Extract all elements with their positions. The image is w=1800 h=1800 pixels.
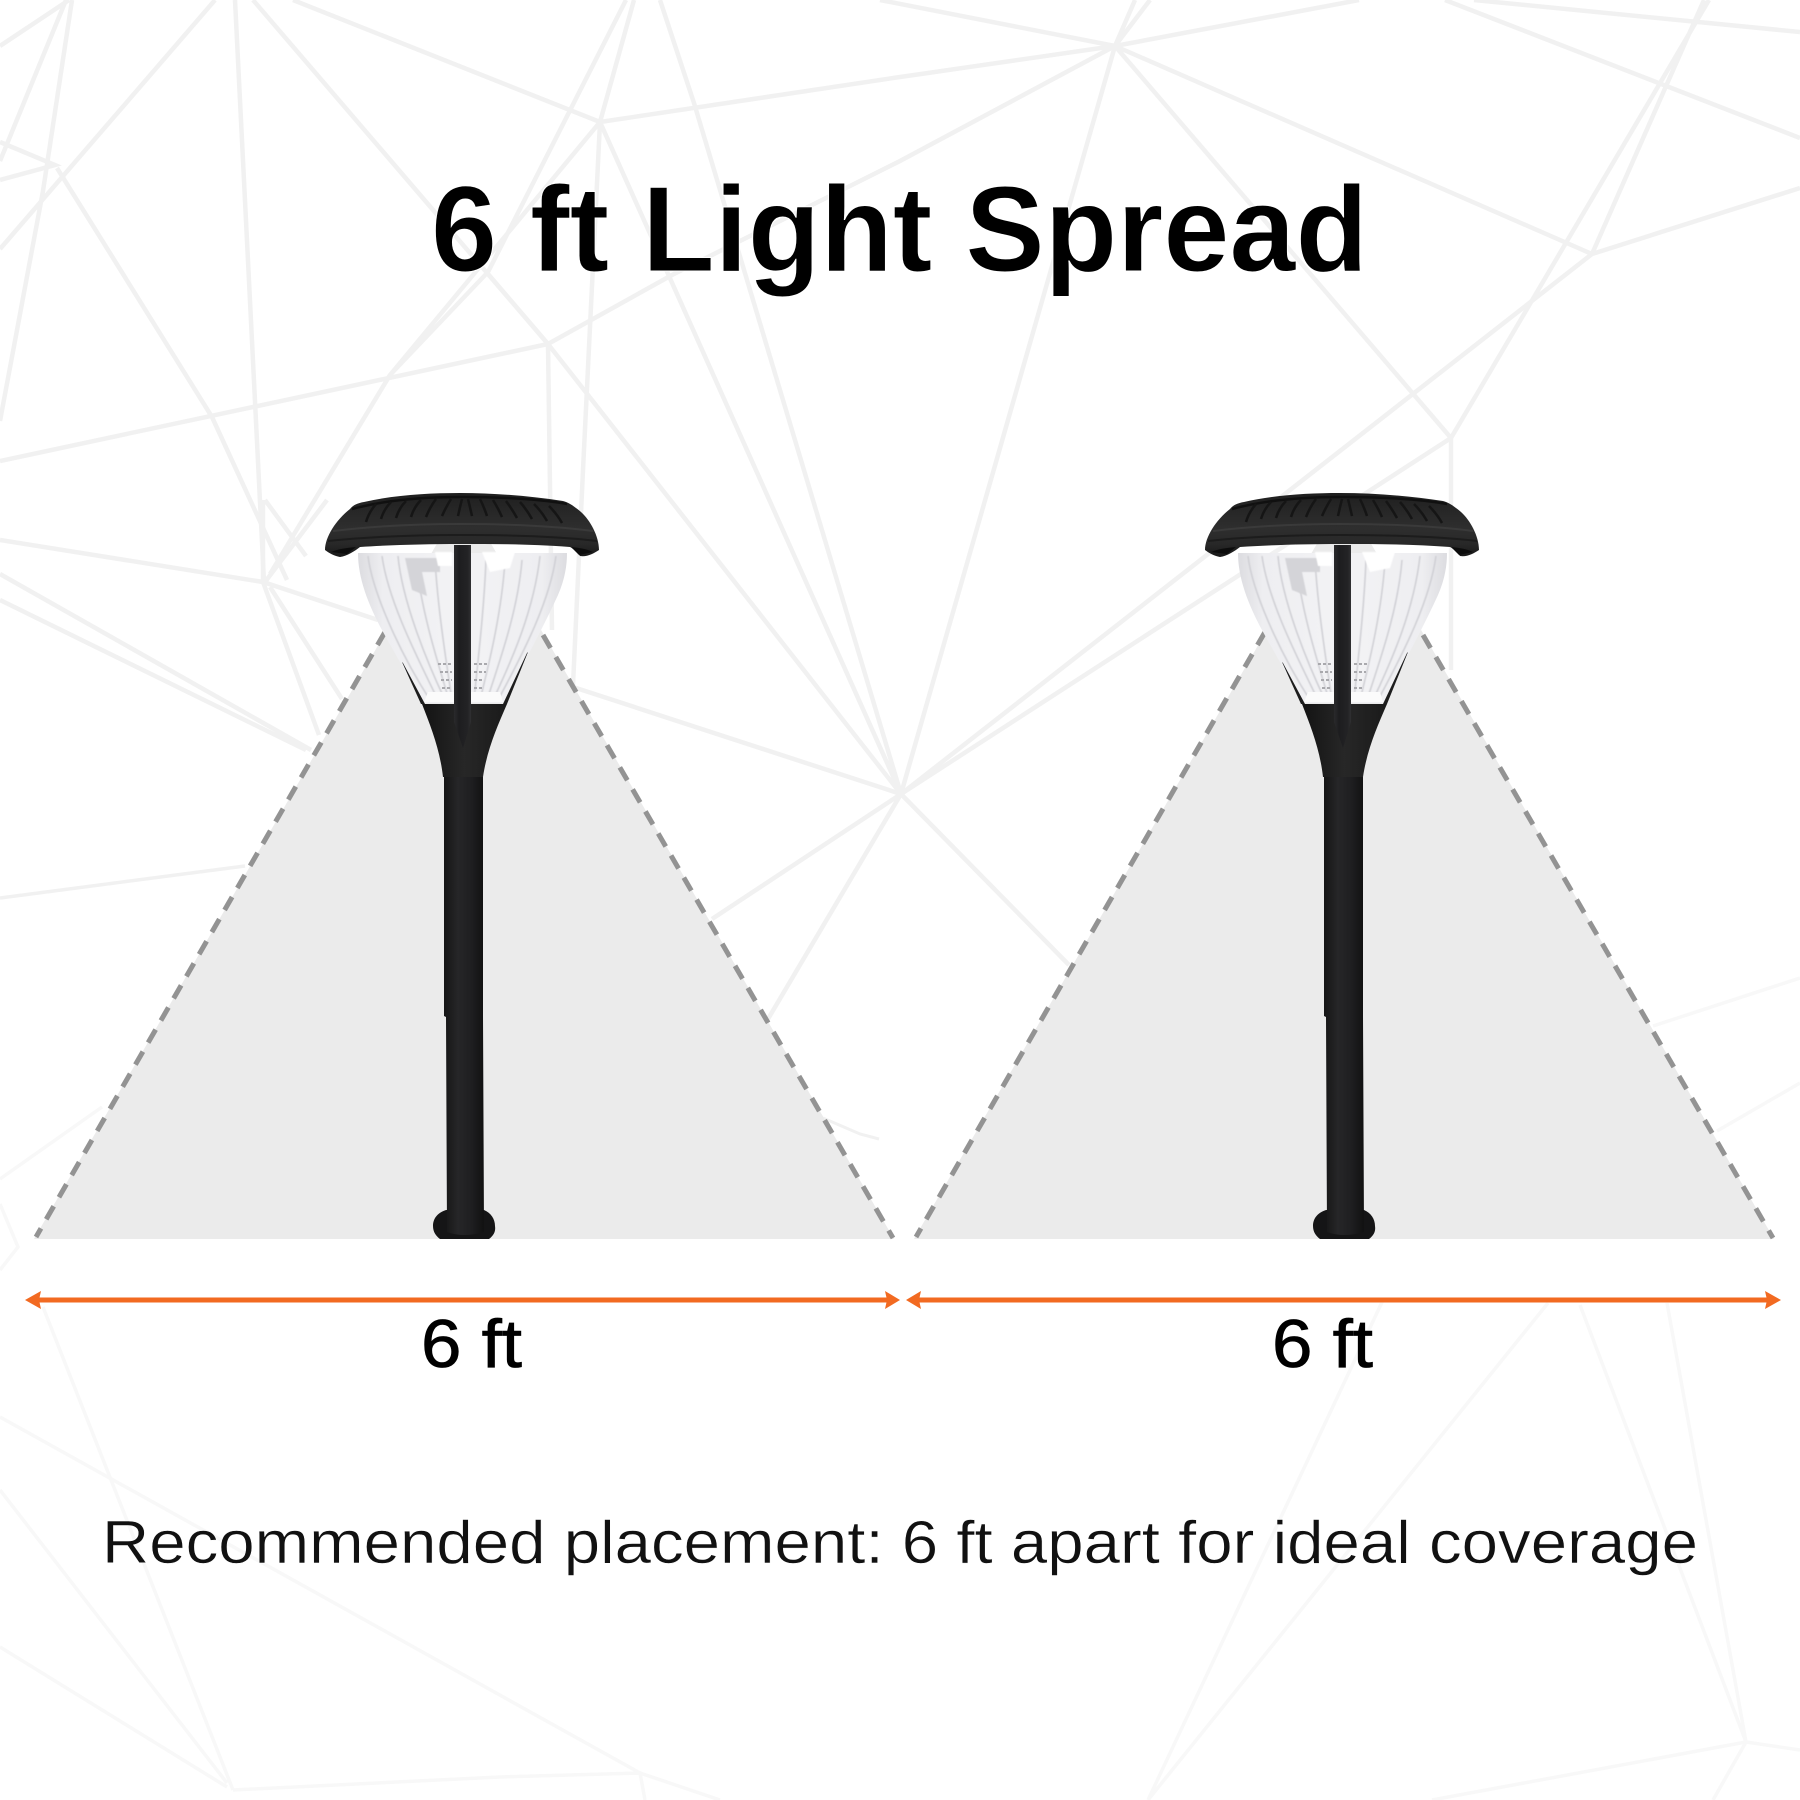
solar path light: right xyxy=(1205,493,1479,1239)
arrow: left dimension xyxy=(25,1291,900,1309)
lens inner highlights xyxy=(1285,558,1320,596)
center post xyxy=(454,545,471,748)
base foot xyxy=(1313,1210,1375,1239)
label: right 6 ft: 6 ft xyxy=(1272,1306,1373,1382)
lens inner highlights xyxy=(405,558,440,596)
label: left 6 ft: 6 ft xyxy=(421,1306,522,1382)
light cone: left xyxy=(34,497,894,1239)
arrow: right dimension xyxy=(906,1291,1781,1309)
cap xyxy=(1205,493,1479,557)
placement note: Recommended placement: 6 ft apart for ideal coverage xyxy=(102,1509,1698,1576)
solar path light: left xyxy=(325,493,599,1239)
shaft xyxy=(444,777,484,1235)
shaft xyxy=(1324,777,1364,1235)
light cone: right xyxy=(914,497,1774,1239)
lens grain xyxy=(438,664,488,688)
glass struts xyxy=(402,652,528,704)
center post xyxy=(1334,545,1351,748)
glass struts xyxy=(1282,652,1408,704)
cap xyxy=(325,493,599,557)
glass lens xyxy=(1238,552,1447,703)
glass lens xyxy=(358,552,567,703)
title: 6 ft Light Spread xyxy=(431,161,1368,297)
collar xyxy=(1302,704,1387,777)
base foot xyxy=(433,1210,495,1239)
collar xyxy=(422,704,507,777)
lens grain xyxy=(1318,664,1368,688)
